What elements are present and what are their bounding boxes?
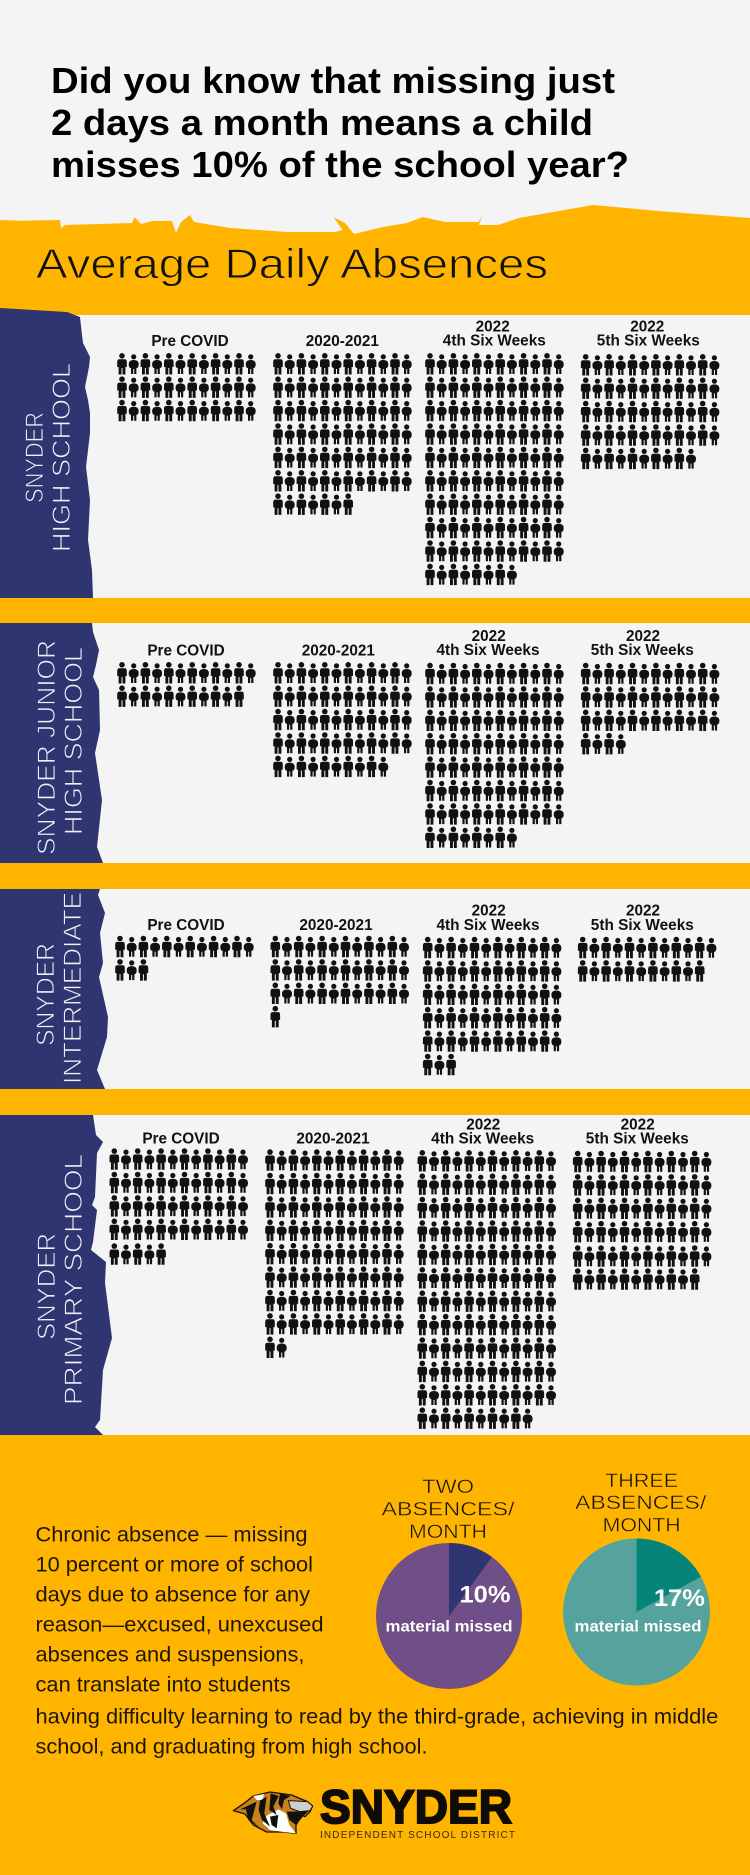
column header: 2022 5th Six Weeks: 5th Six Weeks — [586, 1130, 689, 1147]
column header: 2020-2021: 2020-2021 — [299, 917, 373, 934]
column header: 2022 5th Six Weeks: 5th Six Weeks — [591, 917, 694, 934]
column header: Pre COVID: Pre COVID — [147, 917, 225, 934]
wordmark: Independent School District: INDEPENDENT SCHOOL DISTRICT — [320, 1830, 515, 1841]
text block: chronic absence — [36, 1524, 718, 1758]
label text: junior high — [33, 640, 88, 855]
panel: Snyder High School — [0, 308, 719, 598]
pie chart: 10%: 10% — [460, 1582, 510, 1609]
pictogram: 4th Six Weeks — [418, 1150, 556, 1429]
torn navy label: junior high — [0, 623, 103, 863]
column header: 2022 4th Six Weeks — [436, 628, 540, 659]
label text: high school: HIGH SCHOOL — [48, 363, 76, 552]
pictogram: Pre COVID — [117, 353, 256, 421]
pie chart: 17%: material missed — [574, 1619, 702, 1636]
column header: 2022 4th Six Weeks — [443, 319, 546, 350]
column header: Pre COVID: Pre COVID — [142, 1130, 220, 1147]
label text: intermediate: SNYDER — [32, 943, 60, 1046]
title: misses 10% of the school year? — [51, 144, 629, 185]
torn navy label: primary — [0, 1115, 112, 1435]
pie chart: 17%: 17% — [654, 1585, 705, 1612]
yellow band 1 — [0, 598, 750, 623]
panel: Snyder Junior High School — [0, 623, 719, 863]
column header: 2022 5th Six Weeks — [591, 903, 694, 934]
column header: 2022 5th Six Weeks — [597, 319, 700, 350]
column header: 2022 5th Six Weeks: 5th Six Weeks — [597, 333, 700, 350]
heading: two absences per month — [382, 1477, 515, 1543]
column header: Pre COVID: Pre COVID — [151, 333, 229, 350]
text block: chronic absence: absences and suspensions, — [36, 1644, 304, 1667]
heading: three absences per month: ABSENCES/ — [575, 1493, 707, 1514]
label text: high school — [21, 363, 76, 552]
icon: tiger head — [233, 1792, 313, 1833]
heading: three absences per month: MONTH — [603, 1516, 681, 1537]
pictogram: 4th Six Weeks — [425, 663, 564, 848]
pictogram: 5th Six Weeks — [581, 354, 719, 469]
column header: Pre COVID: Pre COVID — [147, 642, 225, 659]
pictogram: 4th Six Weeks — [425, 353, 564, 585]
pictogram: 5th Six Weeks — [573, 1151, 711, 1290]
pie chart: 10% — [376, 1543, 522, 1689]
column header: 2022 5th Six Weeks: 2022 — [626, 628, 660, 645]
column header: 2022 4th Six Weeks — [431, 1116, 534, 1147]
yellow band 3 — [0, 1089, 750, 1115]
label text: junior high: HIGH SCHOOL — [60, 647, 88, 835]
pie chart: 10%: material missed — [386, 1619, 512, 1636]
column header: 2022 4th Six Weeks: 4th Six Weeks — [436, 917, 540, 934]
title: 2 days a month means a child — [51, 102, 593, 143]
title — [51, 60, 629, 185]
label text: intermediate — [32, 892, 87, 1084]
wordmark: SNYDER: SNYDER — [320, 1780, 512, 1833]
text block: chronic absence: having difficulty learning to read by the third-grade, achieving in middle — [36, 1705, 718, 1728]
column header: 2022 4th Six Weeks — [436, 903, 540, 934]
column header: 2022 4th Six Weeks: 2022 — [476, 319, 510, 336]
pictogram: 2020-2021 — [273, 662, 412, 777]
text block: chronic absence: 10 percent or more of school — [36, 1554, 313, 1577]
footer panel background — [0, 1435, 750, 1875]
torn yellow banner — [0, 205, 750, 315]
pictogram: 2020-2021 — [270, 936, 409, 1027]
label text: high school: SNYDER — [21, 412, 49, 503]
column header: 2022 4th Six Weeks: 4th Six Weeks — [436, 642, 540, 659]
logo: Snyder ISD — [233, 1780, 515, 1841]
pictogram: 4th Six Weeks — [423, 937, 561, 1075]
pictogram: Pre COVID — [115, 936, 254, 981]
column header: 2020-2021: 2020-2021 — [296, 1130, 370, 1147]
heading: three absences per month: THREE — [605, 1471, 678, 1492]
pictogram: 5th Six Weeks — [578, 937, 716, 982]
pictogram: 2020-2021 — [273, 353, 412, 515]
text block: chronic absence: Chronic absence — missing — [36, 1524, 308, 1547]
column header: 2022 4th Six Weeks: 2022 — [472, 628, 506, 645]
label text: intermediate: INTERMEDIATE — [59, 892, 87, 1084]
column header: 2022 5th Six Weeks: 2022 — [621, 1116, 655, 1133]
text block: chronic absence: school, and graduating from high school. — [36, 1735, 427, 1758]
heading: two absences per month: MONTH — [409, 1522, 487, 1543]
text block: chronic absence: days due to absence for any — [36, 1584, 311, 1607]
title: Did you know that missing just — [51, 60, 615, 101]
yellow band 2 — [0, 863, 750, 889]
column header: 2022 5th Six Weeks: 2022 — [626, 903, 660, 920]
text block: chronic absence: reason—excused, unexcused — [36, 1614, 324, 1637]
panel: Snyder Intermediate — [0, 889, 716, 1089]
panel: Snyder Primary School — [0, 1115, 711, 1435]
label text: primary: PRIMARY SCHOOL — [60, 1154, 88, 1405]
pictogram: Pre COVID — [117, 662, 256, 707]
heading: three absences per month — [575, 1471, 707, 1537]
pictogram: 2020-2021 — [265, 1149, 404, 1358]
pie chart: 17% — [563, 1538, 710, 1686]
pictogram: Pre COVID — [110, 1148, 248, 1265]
column header: 2022 4th Six Weeks: 2022 — [472, 903, 506, 920]
text block: chronic absence: can translate into students — [36, 1674, 290, 1697]
column header: 2022 5th Six Weeks — [591, 628, 694, 659]
column header: 2020-2021: 2020-2021 — [302, 642, 375, 659]
heading: two absences per month: ABSENCES/ — [382, 1500, 515, 1521]
pictogram: 5th Six Weeks — [581, 663, 719, 754]
heading: two absences per month: TWO — [422, 1477, 474, 1498]
label text: primary — [33, 1154, 88, 1405]
column header: 2022 5th Six Weeks — [586, 1116, 689, 1147]
column header: 2022 4th Six Weeks: 4th Six Weeks — [431, 1130, 534, 1147]
torn navy label: high school — [0, 308, 93, 598]
label text: junior high: SNYDER JUNIOR — [33, 640, 61, 855]
column header: 2022 5th Six Weeks: 2022 — [630, 319, 664, 336]
label text: primary: SNYDER — [33, 1233, 61, 1340]
column header: 2022 4th Six Weeks: 4th Six Weeks — [443, 333, 546, 350]
torn navy label: intermediate — [0, 889, 108, 1089]
heading: Average Daily Absences: Average Daily Absences — [36, 240, 548, 287]
column header: 2022 4th Six Weeks: 2022 — [466, 1116, 500, 1133]
column header: 2020-2021: 2020-2021 — [306, 333, 379, 350]
column header: 2022 5th Six Weeks: 5th Six Weeks — [591, 642, 694, 659]
